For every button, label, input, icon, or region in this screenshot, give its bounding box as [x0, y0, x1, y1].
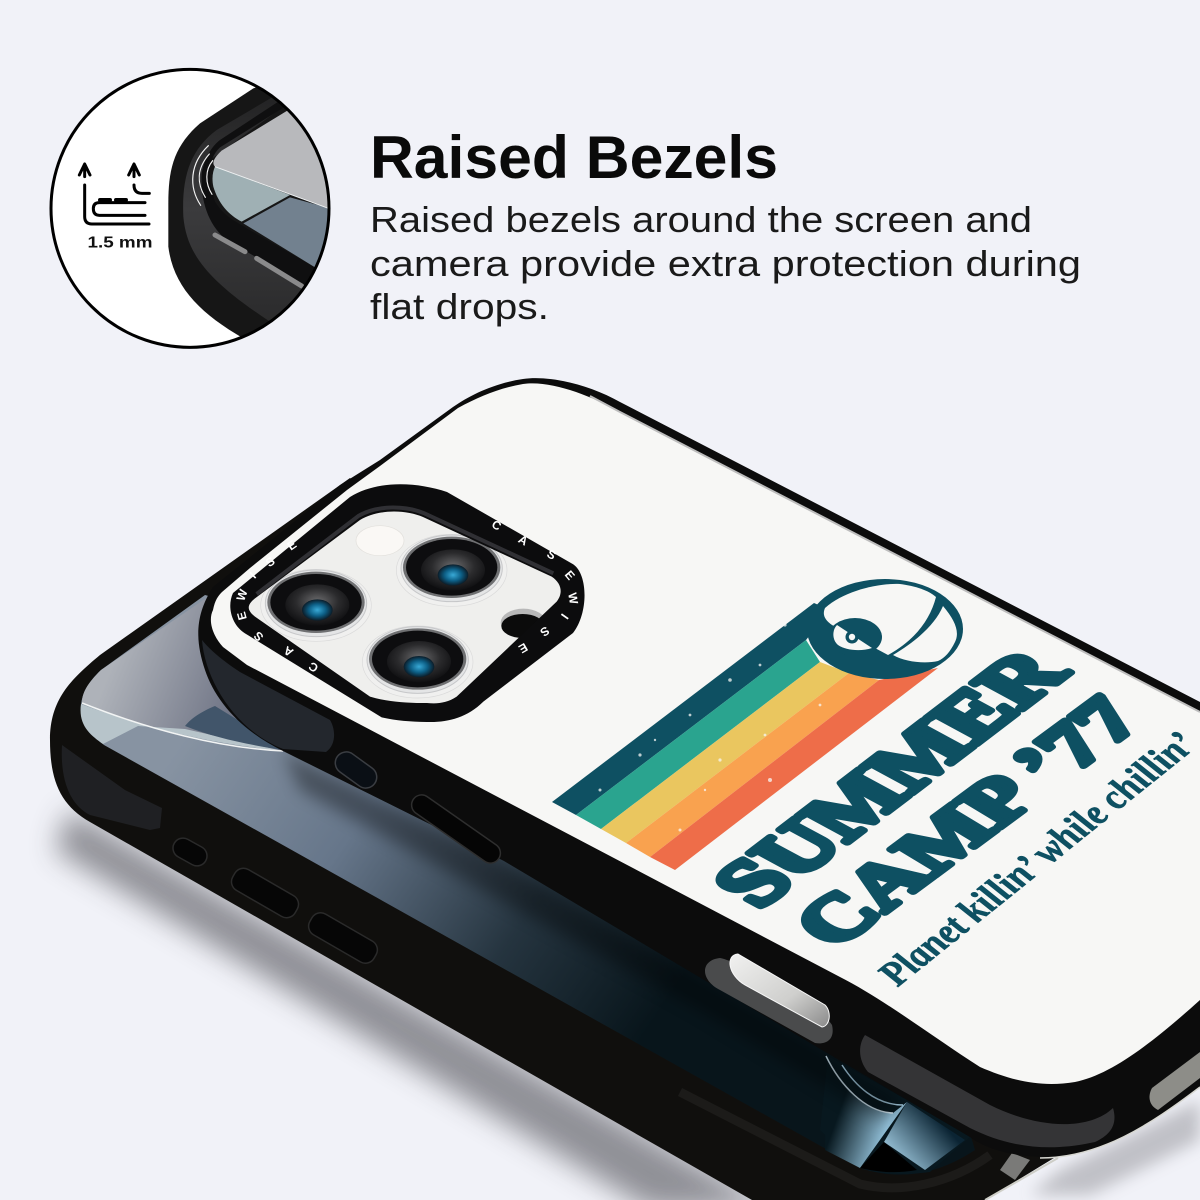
- circle outline: [51, 69, 329, 347]
- ring lettering: C: [489, 517, 504, 534]
- ring lettering: E: [234, 610, 250, 622]
- camera plate: [249, 511, 561, 703]
- inset screen grey: [213, 110, 328, 208]
- ring lettering: [233, 517, 581, 675]
- lidar hole: [501, 609, 546, 638]
- inset highlight: [215, 235, 302, 286]
- body text: flat drops.: [370, 286, 549, 327]
- circle fill: [51, 69, 329, 347]
- back phone corner bump: [62, 745, 162, 830]
- inset light wedge: [213, 167, 290, 222]
- front phone shadow on screen: [283, 751, 907, 1120]
- screen corner light rays: [820, 1056, 970, 1174]
- back phone: [50, 478, 1100, 1200]
- button: volume down: [305, 909, 381, 967]
- ring inner lip: [257, 508, 553, 594]
- tagline: Planet killin’ while chillin’: [866, 726, 1200, 993]
- screen grey wedge: [82, 592, 283, 751]
- front phone right shadow: [1030, 1100, 1200, 1195]
- beach ball: [807, 579, 963, 679]
- button: volume up: [228, 865, 302, 921]
- lens: bottom: [362, 626, 473, 698]
- ring lettering: A: [516, 532, 531, 549]
- heading: Raised Bezels: [370, 124, 778, 191]
- bezel inner rim: [202, 102, 306, 285]
- ring lettering: E: [516, 640, 530, 656]
- flash: [356, 526, 404, 556]
- ring lettering: W: [565, 592, 581, 606]
- button: action: [169, 835, 211, 869]
- CAMP 77 title: CAMP ’77: [775, 684, 1160, 959]
- ring lettering: S: [538, 623, 552, 639]
- bezel height label: 1.5 mm: [87, 235, 152, 252]
- inset screen dark: [243, 197, 333, 268]
- bezel outer band: [168, 88, 320, 336]
- charging port: [705, 954, 833, 1043]
- bezel close-up: [168, 88, 328, 336]
- front corner bump: [202, 640, 334, 752]
- front lower right silver line: [1040, 1087, 1200, 1158]
- inset white line: [215, 167, 328, 208]
- camera module: [230, 484, 585, 722]
- ring lettering: E: [285, 537, 299, 553]
- body text: [370, 199, 1081, 327]
- ring lettering: S: [251, 629, 266, 644]
- ring lettering: W: [233, 587, 251, 603]
- screen dark wave: [185, 706, 283, 750]
- bezel height icon: [79, 164, 149, 224]
- right edge metal grille: [1150, 1052, 1200, 1110]
- ring lettering: A: [281, 643, 296, 660]
- ring lettering: I: [247, 569, 259, 581]
- phone shadow: [55, 810, 780, 1200]
- camera ring: [230, 484, 585, 722]
- button: power: [408, 791, 504, 867]
- ring lettering: C: [306, 659, 321, 675]
- back phone silver line: [985, 1158, 1058, 1200]
- ring lettering: E: [562, 568, 578, 583]
- edge highlight: [590, 396, 1200, 712]
- ring lettering: S: [545, 547, 558, 563]
- white bezel arcs: [193, 146, 213, 205]
- SUMMER title: SUMMER: [692, 636, 1088, 919]
- bezel grey band: [183, 97, 313, 322]
- screen light wedge: [81, 704, 283, 751]
- lens: top: [396, 534, 507, 606]
- retro stripes: [552, 603, 938, 870]
- front lower right bump: [860, 1035, 1114, 1147]
- front phone: [198, 378, 1200, 1158]
- screen white arc: [82, 703, 283, 751]
- ring lettering: S: [263, 554, 277, 570]
- back phone bumper: [50, 478, 1100, 1200]
- body text: Raised bezels around the screen and: [370, 199, 1032, 240]
- ring lettering: I: [558, 611, 571, 622]
- back phone metal edge: [1000, 1153, 1030, 1180]
- white back plate: [211, 383, 1200, 1084]
- back phone screen: [81, 595, 975, 1175]
- body text: camera provide extra protection during: [370, 243, 1081, 284]
- back phone bumper ridge: [680, 1092, 990, 1188]
- button: silencer: [331, 748, 381, 792]
- front phone bumper: [198, 378, 1200, 1157]
- inset circle: [51, 69, 340, 347]
- lens: left: [261, 569, 371, 641]
